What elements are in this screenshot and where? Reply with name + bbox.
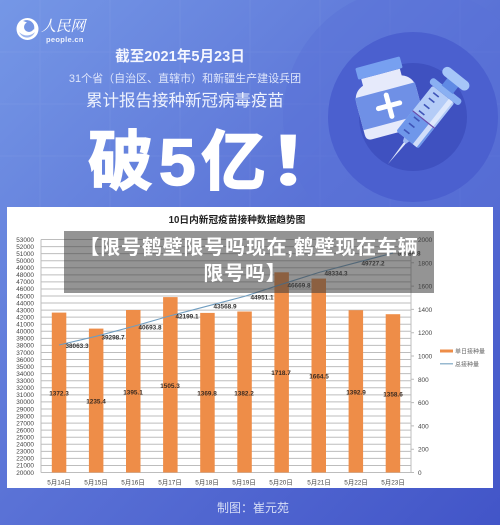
left axis labels: 33000 xyxy=(16,378,34,385)
left axis labels: 24000 xyxy=(16,442,34,449)
line value labels: 46669.8 xyxy=(287,282,311,290)
x axis labels: 5月22日 xyxy=(344,478,368,486)
icon: syringe xyxy=(373,63,474,176)
headline: over 500 million: 5 xyxy=(159,125,196,199)
line value labels: 49727.2 xyxy=(361,260,385,268)
line value labels: 43568.9 xyxy=(213,304,237,310)
x axis labels: 5月17日 xyxy=(158,478,182,486)
left axis labels: 34000 xyxy=(16,371,34,378)
x axis labels: 5月21日 xyxy=(307,478,331,486)
legend xyxy=(440,348,485,368)
right axis labels: 1400 xyxy=(418,307,433,314)
left axis labels: 39000 xyxy=(16,336,34,343)
bar value labels: 1392.9 xyxy=(346,390,366,396)
bars: daily doses xyxy=(52,272,400,472)
left axis labels: 48000 xyxy=(16,272,34,279)
logo: people.cn xyxy=(16,15,87,44)
headline: over 500 million: 破 xyxy=(88,125,153,198)
left axis labels: 53000 xyxy=(16,237,34,244)
legend: 总接种量 xyxy=(455,360,479,368)
line value labels: 51086.8 xyxy=(397,250,421,258)
left axis labels: 20000 xyxy=(16,470,34,477)
left axis labels: 25000 xyxy=(16,434,34,442)
bar value labels: 1382.2 xyxy=(234,390,254,398)
overlay title banner: 限号吗】 xyxy=(203,263,287,285)
right axis labels: 800 xyxy=(418,377,429,384)
left axis labels: 52000 xyxy=(16,244,34,251)
line value labels: 42199.1 xyxy=(175,314,199,320)
x axis labels: 5月20日 xyxy=(269,478,293,486)
x axis labels: 5月15日 xyxy=(84,478,108,486)
chart title: 10日内新冠疫苗接种数据趋势图 xyxy=(169,213,305,226)
left axis labels: 43000 xyxy=(16,307,34,314)
text: ！ xyxy=(268,125,349,198)
line value labels: 48334.3 xyxy=(324,270,348,278)
bar value labels xyxy=(49,370,403,406)
left axis labels: 44000 xyxy=(16,300,34,307)
right axis labels: 1600 xyxy=(418,284,433,291)
left axis labels: 40000 xyxy=(16,329,34,336)
bar value labels: 1372.3 xyxy=(49,390,69,398)
left axis labels: 23000 xyxy=(16,449,34,456)
right axis labels: 2000 xyxy=(418,237,433,244)
left axis labels: 27000 xyxy=(16,420,34,427)
headline: over 500 million: 亿 xyxy=(201,125,266,198)
left axis labels: 22000 xyxy=(16,456,34,463)
right axis labels: 1000 xyxy=(418,354,433,360)
bar value labels: 1664.5 xyxy=(309,374,329,380)
text: cumulative vaccination: 累计报告接种新冠病毒疫苗 xyxy=(86,92,284,110)
right axis labels: 0 xyxy=(418,470,422,477)
bar value labels: 1505.3 xyxy=(160,383,180,390)
right axis labels xyxy=(411,237,433,477)
x axis labels: 5月18日 xyxy=(195,478,219,486)
right axis labels: 1800 xyxy=(418,260,433,267)
x axis labels xyxy=(47,478,405,486)
left axis labels: 36000 xyxy=(16,357,34,364)
x axis labels: 5月16日 xyxy=(121,478,145,486)
left axis labels: 46000 xyxy=(16,286,34,293)
credit: 制图：崔元苑 xyxy=(217,501,289,515)
overlay title banner: 【限号鹤壁限号吗现在,鹤壁现在车辆 xyxy=(79,237,419,259)
line value labels: 39298.7 xyxy=(101,334,125,342)
left axis labels: 45000 xyxy=(16,293,34,300)
bar value labels: 1395.1 xyxy=(123,390,143,396)
left axis labels: 51000 xyxy=(16,251,34,258)
text: regions: 31个省（自治区、直辖市）和新疆生产建设兵团 xyxy=(69,73,301,85)
icon: logo globe xyxy=(16,18,38,40)
bar value labels: 1718.7 xyxy=(271,370,291,377)
left axis labels: 37000 xyxy=(16,350,34,357)
left axis labels: 32000 xyxy=(16,385,34,392)
line value labels: 40693.8 xyxy=(138,324,162,332)
left axis labels: 28000 xyxy=(16,413,34,420)
left axis labels: 41000 xyxy=(16,322,34,328)
left axis labels: 21000 xyxy=(16,463,34,470)
left axis labels: 38000 xyxy=(16,343,34,350)
vaccine illustration with concentric circles xyxy=(328,32,498,202)
left axis labels: 47000 xyxy=(16,279,34,286)
left axis labels: 49000 xyxy=(16,265,34,272)
headline: over 500 million xyxy=(88,125,349,199)
line value labels: 38063.3 xyxy=(65,343,89,350)
icon: vaccine vial xyxy=(347,54,426,141)
left axis labels: 50000 xyxy=(16,258,34,265)
overlay title banner xyxy=(64,231,434,293)
line value labels: 44951.1 xyxy=(250,294,274,302)
x axis labels: 5月23日 xyxy=(381,478,405,486)
bar value labels: 1358.6 xyxy=(383,392,403,398)
right axis labels: 400 xyxy=(418,423,429,430)
panel: chart xyxy=(7,207,493,488)
right axis labels: 1200 xyxy=(418,330,433,337)
left axis labels xyxy=(16,237,34,477)
bar value labels: 1235.4 xyxy=(86,398,106,406)
left axis labels: 29000 xyxy=(16,406,34,413)
heading: date: 截至2021年5月23日 xyxy=(115,49,245,65)
legend: 单日接种量 xyxy=(455,348,485,356)
x axis labels: 5月19日 xyxy=(232,478,256,486)
right axis labels: 600 xyxy=(418,400,429,407)
logo wordmark: 人民网 xyxy=(41,15,85,36)
left axis labels: 26000 xyxy=(16,428,34,434)
line value labels xyxy=(65,250,421,350)
bar value labels: 1369.8 xyxy=(197,390,217,398)
logo url: people.cn xyxy=(46,35,84,44)
right axis labels: 200 xyxy=(418,447,429,454)
left axis labels: 42000 xyxy=(16,314,34,322)
left axis labels: 31000 xyxy=(16,392,34,399)
x axis labels: 5月14日 xyxy=(47,478,71,486)
left axis labels: 35000 xyxy=(16,364,34,371)
line: cumulative doses xyxy=(59,253,393,345)
left axis labels: 30000 xyxy=(16,399,34,406)
